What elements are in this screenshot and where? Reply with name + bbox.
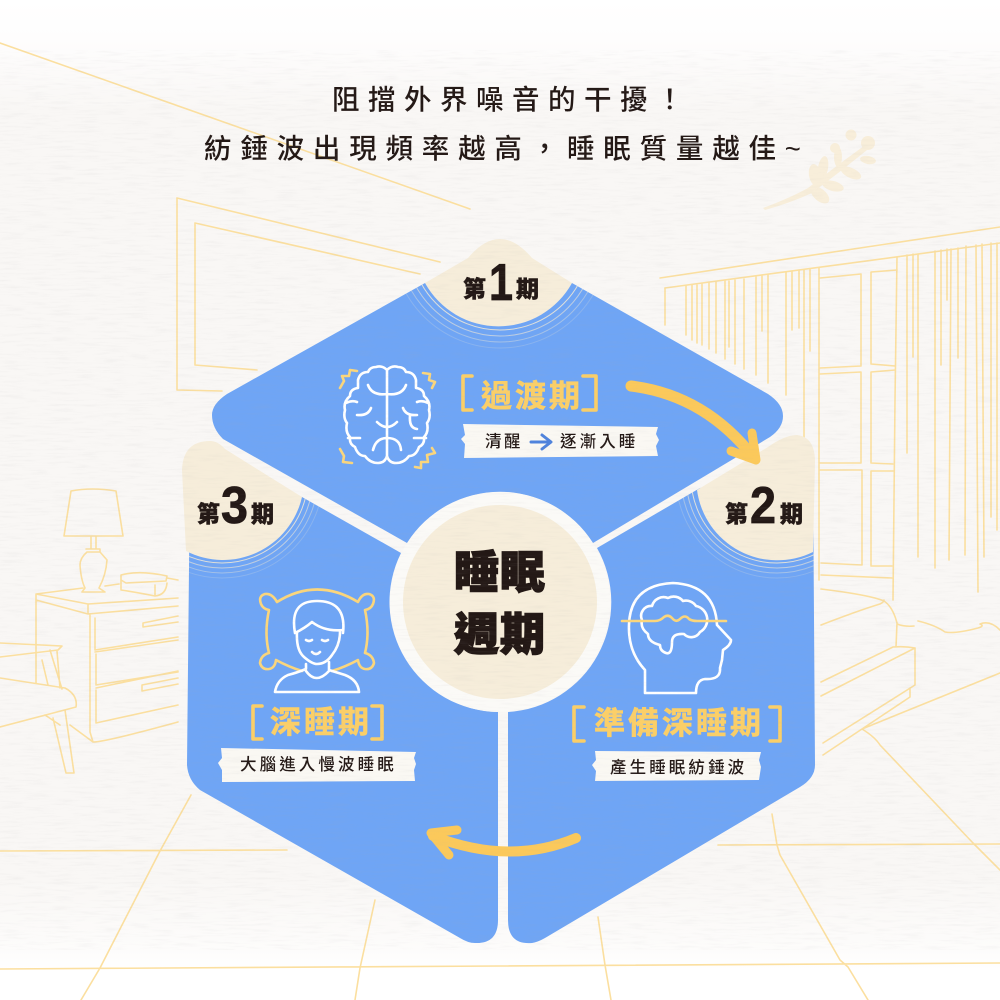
sofa (821, 589, 1000, 870)
armchair (0, 643, 76, 773)
stage 3 label: 第 (197, 501, 220, 527)
stage 2 label: 期 (780, 501, 803, 527)
stage 2 label (725, 477, 803, 535)
floor tiles (0, 795, 1000, 1000)
tape label: brain enters slow waves (218, 748, 416, 782)
stage 3 label: 3 (221, 477, 248, 535)
stage 2 label: 第 (725, 501, 748, 527)
ceiling and wall window lines, left (0, 43, 470, 391)
cream cap (425, 239, 572, 326)
title line one: 阻擋外界噪音的干擾！ (332, 84, 692, 115)
icon: brain (340, 366, 435, 468)
title (204, 84, 810, 164)
stage 3 label (197, 477, 274, 535)
center title: 睡眠 (454, 547, 546, 598)
stage 3 label: 期 (251, 501, 274, 527)
icon: sleeping head on pillow (260, 590, 374, 692)
stage 2 label: 2 (750, 477, 776, 535)
icon: blue arrow (531, 435, 551, 449)
stage 1 label (463, 254, 539, 312)
tape label: brain enters slow waves: 大腦進入慢波睡眠 (240, 755, 397, 774)
nightstand (36, 584, 178, 742)
title line two: 紡錘波出現頻率越高，睡眠質量越佳~ (204, 133, 810, 164)
bedside lamp (64, 489, 123, 592)
stage 1 label: 期 (516, 276, 539, 302)
icon: decorative sprig (763, 130, 877, 210)
stage 1 label: 第 (463, 276, 486, 302)
heading: deep sleep: 深睡期 (270, 705, 372, 740)
cream cap (697, 435, 815, 560)
blue panel (508, 470, 815, 943)
heading: preparing deep sleep: 準備深睡期 (594, 706, 764, 741)
heading: transition: 過渡期 (481, 379, 583, 414)
panel: stage 1 transition (212, 239, 783, 543)
tape label: awake to sleep (461, 424, 659, 458)
tape label: awake to sleep: 逐漸入睡 (560, 432, 638, 451)
sound rings (189, 498, 319, 578)
stacked books (121, 573, 178, 596)
ceiling and curtain rail, right (660, 227, 1000, 288)
sound rings (406, 284, 594, 348)
panel: stage 3 deep sleep (182, 441, 498, 943)
arrow: stage 1 to stage 2 (631, 386, 756, 460)
panel: stage 2 preparing deep sleep (508, 435, 815, 944)
blue panel (187, 470, 498, 943)
tape label: awake to sleep: 清醒 (485, 432, 523, 451)
window panes (819, 268, 897, 580)
blue rhombus (212, 283, 783, 543)
sound rings (678, 492, 814, 578)
center circle: sleep cycle: 週期 (454, 609, 546, 660)
center circle: sleep cycle (390, 492, 610, 712)
tape label: produces spindles: 產生睡眠紡錘波 (610, 757, 747, 777)
icon: head with brain wave (622, 583, 731, 693)
stage 1 label: 1 (489, 254, 513, 312)
cream cap (182, 441, 302, 560)
tape label: produces spindles (592, 751, 761, 781)
curtain lines (665, 243, 997, 600)
arrow: stage 2 to stage 3 (431, 830, 576, 855)
